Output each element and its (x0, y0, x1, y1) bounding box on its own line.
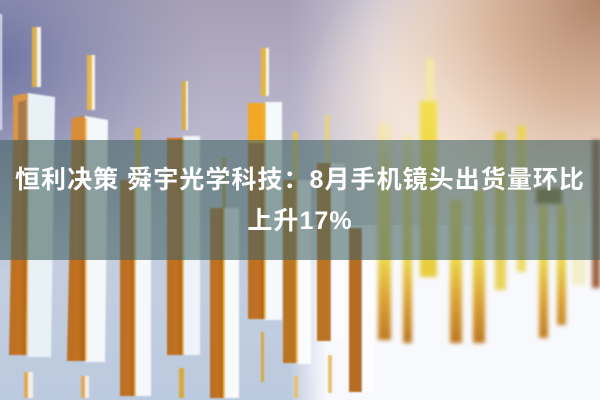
candle 6 (248, 48, 282, 382)
candle 4 (167, 81, 200, 398)
right candlesticks out of focus (378, 58, 600, 343)
candle 9 (349, 228, 375, 392)
candle 8 (317, 115, 345, 393)
translucent title band (0, 140, 600, 260)
title line 1: 恒利决策 舜宇光学科技：8月手机镜头出货量环比 (15, 166, 585, 194)
candle 5 (210, 158, 239, 398)
title line 2: 上升17% (247, 207, 353, 235)
title (15, 166, 585, 235)
candle 1 (9, 27, 55, 398)
left candlesticks (0, 14, 311, 398)
candle 2 (67, 55, 108, 398)
candle 3 (120, 128, 151, 396)
candle 7 (283, 132, 311, 398)
